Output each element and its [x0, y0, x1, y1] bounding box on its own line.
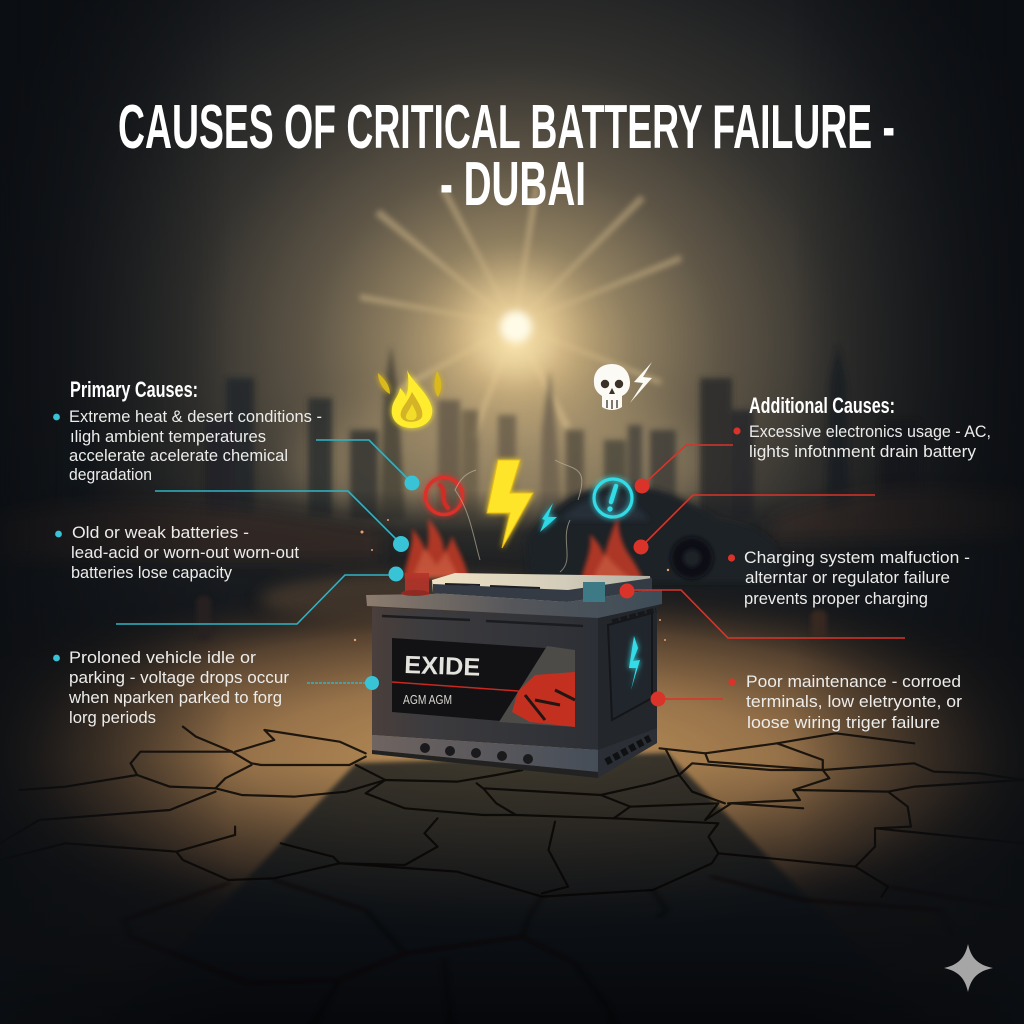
cause: poor maintenance: loose wiring triger failure: [747, 714, 940, 732]
cause: old batteries: Old or weak batteries -: [72, 524, 249, 542]
cause: extreme heat: ıligh ambient temperatures: [70, 428, 266, 446]
cause: prolonged idle: Proloned vehicle idle or: [69, 649, 257, 667]
icon: yellow flame: [378, 370, 441, 428]
battery top cap: [432, 573, 652, 602]
cause: electronics usage: [733, 423, 991, 461]
cause: prolonged idle: when ɴparken parked to forg: [68, 689, 282, 707]
battery lid: [366, 590, 662, 618]
cyan terminal: [583, 582, 605, 602]
cause: poor maintenance: Poor maintenance - corroed: [746, 673, 961, 691]
battery base with holes: [372, 728, 657, 778]
cause: extreme heat: Extreme heat & desert conditions -: [69, 408, 322, 426]
cause: old batteries: batteries lose capacity: [71, 564, 233, 582]
lid grooves: [382, 616, 583, 626]
icon: skull with lightning: [594, 362, 652, 410]
cause: electronics usage: lights infotnment drain battery: [749, 443, 977, 461]
icon: cyan alert circle: [594, 479, 632, 517]
cause: prolonged idle: lorg periods: [69, 709, 156, 727]
bollards in the background: [196, 596, 827, 640]
cause: charging system: Charging system malfuction -: [744, 549, 970, 567]
icon: small cyan bolt: [540, 503, 557, 532]
cause: prolonged idle: [53, 649, 290, 727]
cause: prolonged idle: parking - voltage drops occur: [69, 669, 290, 687]
flames around terminals: [354, 460, 669, 641]
title: [118, 93, 895, 219]
sand dune haze: [0, 490, 1024, 626]
side panel with cyan bolt: [608, 610, 656, 720]
cause: electronics usage: Excessive electronics usage - AC,: [749, 423, 991, 441]
icon: red warning circle: [426, 478, 462, 514]
sun rays and glare: [360, 185, 682, 440]
product label: AGM AGM: [403, 693, 452, 707]
cause: extreme heat: [53, 408, 322, 484]
cause: extreme heat: degradation: [69, 466, 152, 484]
horizon glow: [295, 395, 715, 535]
icon: yellow lightning bolt: [487, 460, 533, 548]
panel: primary causes: [53, 377, 322, 727]
blurred Dubai skyline: [60, 345, 920, 520]
road and horizon band: [0, 490, 1024, 660]
panel: additional causes: [728, 393, 991, 732]
cause: old batteries: [55, 524, 299, 582]
battery shadow on the ground: [110, 753, 930, 1024]
callout lines: additional causes: [620, 445, 905, 706]
cause: extreme heat: accelerate acelerate chemical: [69, 447, 288, 465]
battery right side: [598, 602, 657, 772]
heading: additional causes: Additional Causes:: [749, 393, 895, 418]
heading: primary causes: Primary Causes:: [70, 377, 198, 402]
ground cracks: [0, 727, 1024, 1024]
cause: old batteries: lead-acid or worn-out worn-out: [71, 544, 299, 562]
Exide AGM car battery: [366, 573, 662, 778]
cause: charging system: [728, 549, 970, 608]
cause: charging system: prevents proper charging: [744, 590, 928, 608]
cause: poor maintenance: terminals, low eletryonte, or: [746, 693, 963, 711]
product label: [392, 638, 575, 727]
red terminal: [401, 573, 429, 596]
cause: charging system: alterntar or regulator failure: [745, 569, 950, 587]
callout lines: primary causes: [116, 440, 420, 690]
battery front: [372, 607, 598, 750]
product label: EXIDE: [404, 651, 481, 682]
blurred car behind the battery: [525, 485, 780, 582]
title: - DUBAI: [440, 150, 586, 219]
cracked desert ground: [0, 575, 1024, 1024]
cause: poor maintenance: [728, 673, 963, 732]
icon: four-point sparkle watermark: [944, 944, 993, 992]
bottom fade to dark: [0, 760, 1024, 1024]
